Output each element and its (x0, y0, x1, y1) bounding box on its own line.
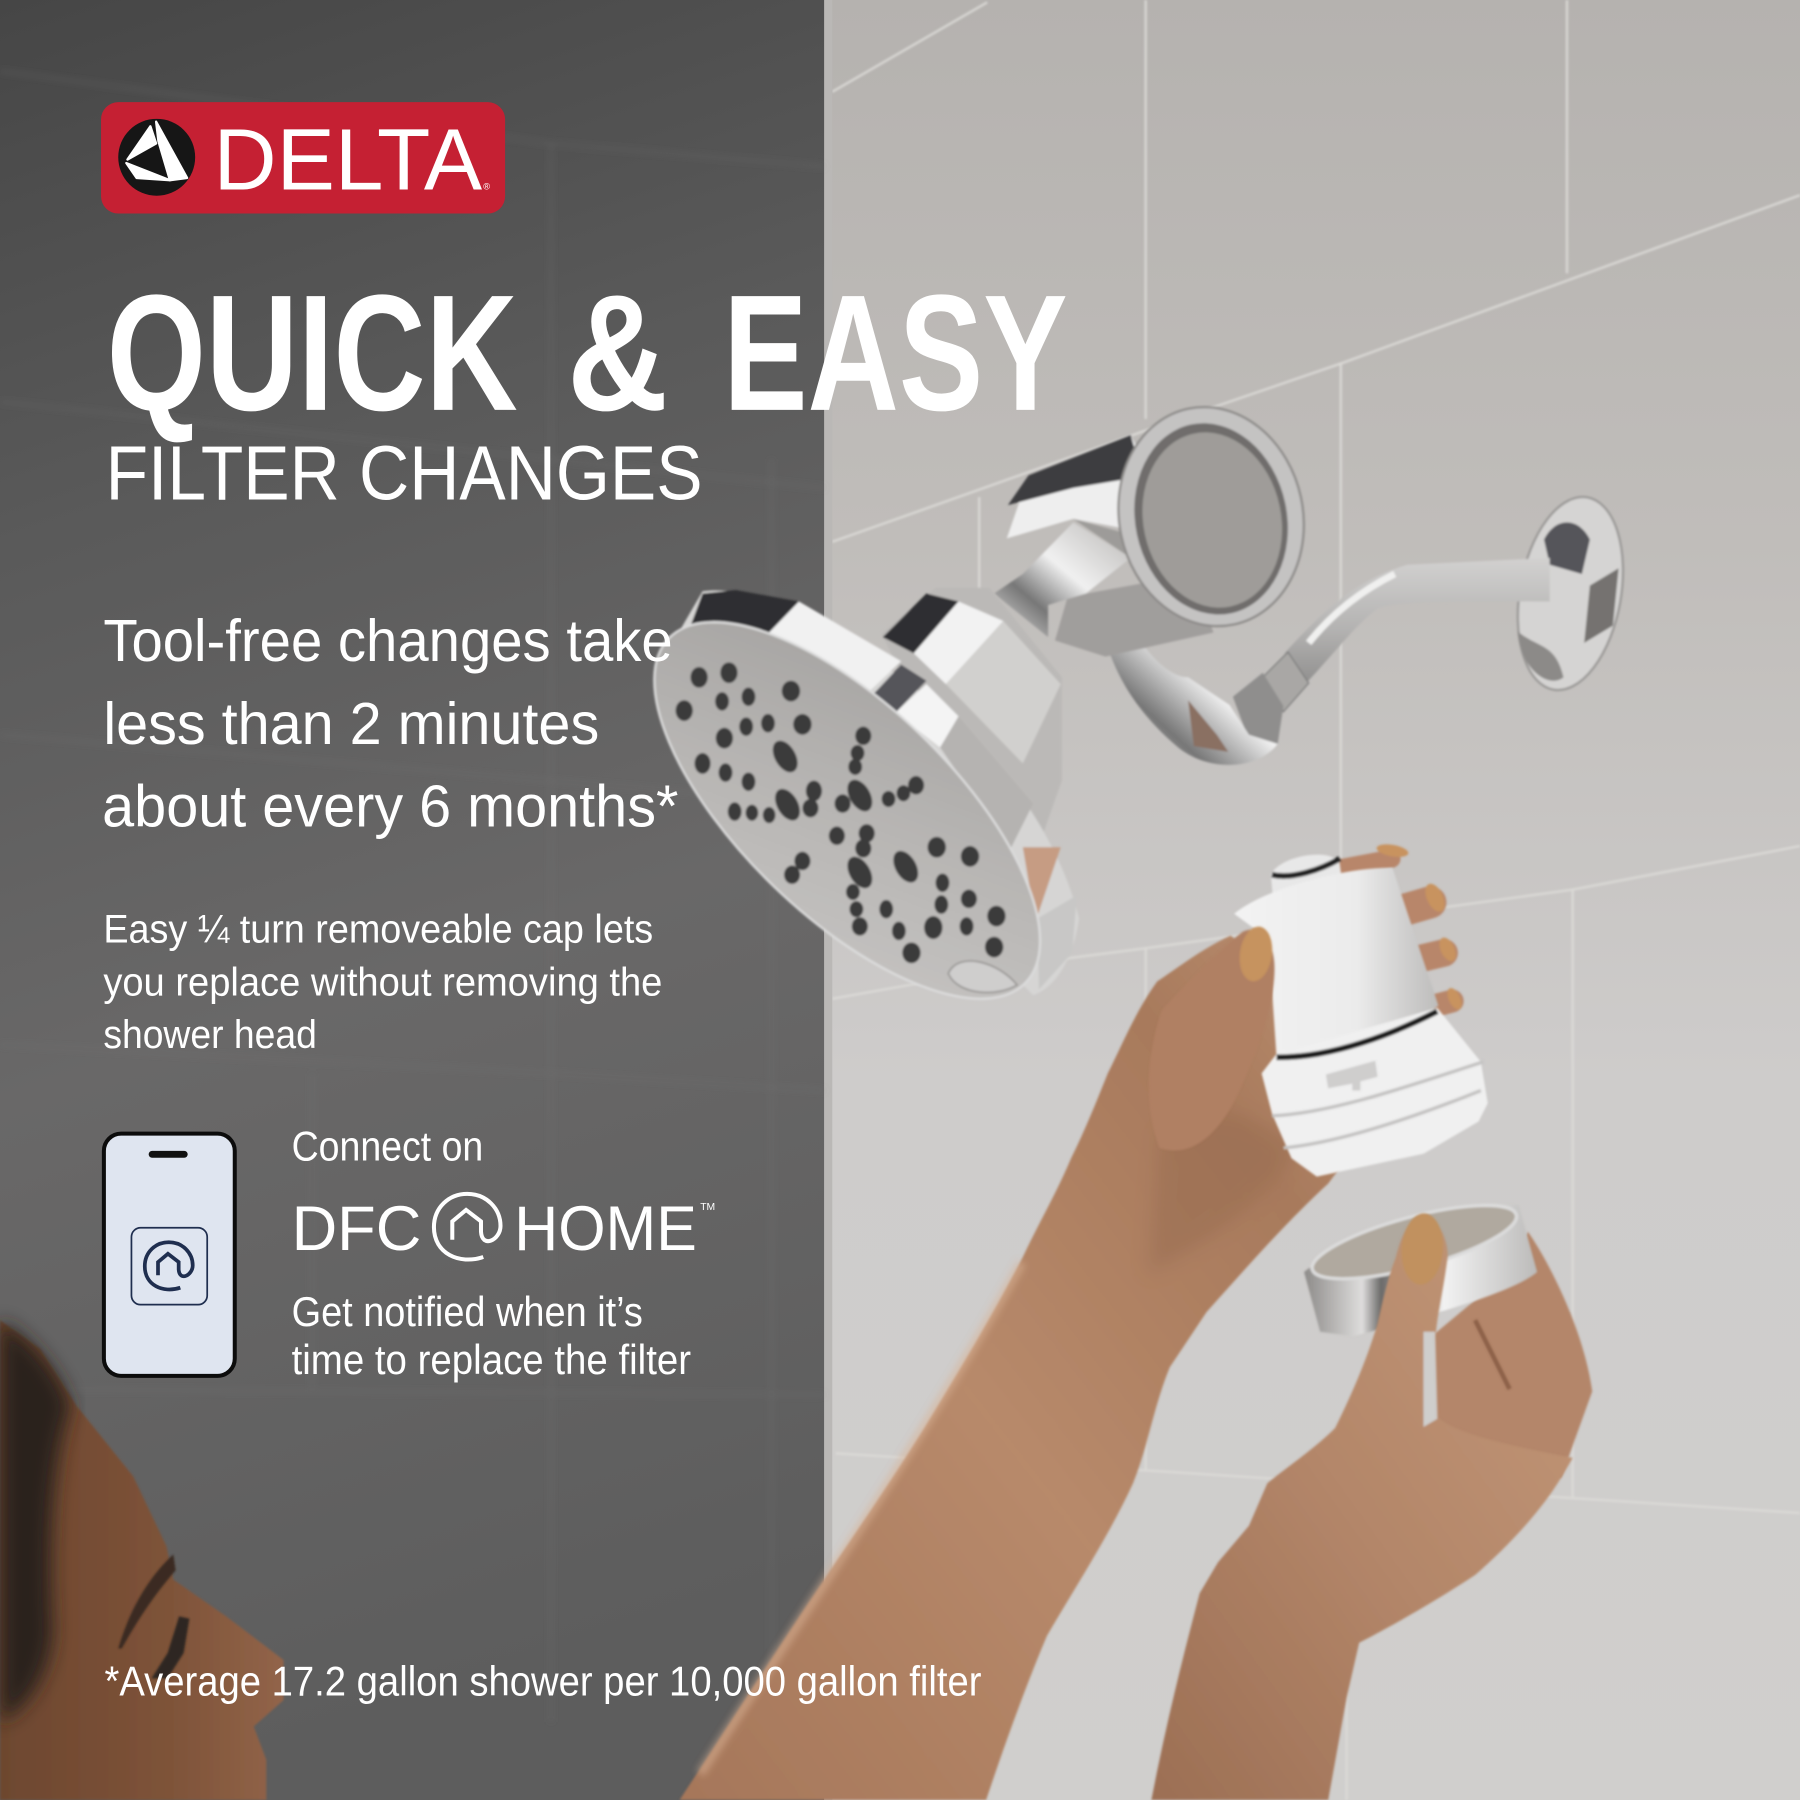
housing opening (1098, 390, 1324, 643)
cone (1073, 519, 1182, 620)
photo: filter housing (994, 390, 1324, 657)
photo: chrome cap (1304, 1190, 1537, 1336)
main benefit text: less than 2 minutes (103, 690, 599, 757)
thumbnail (1399, 1212, 1445, 1286)
app icon tile (131, 1228, 207, 1305)
secondary benefit text: you replace without removing the (103, 959, 662, 1004)
app home logo (145, 1242, 193, 1290)
cap interior (1306, 1190, 1523, 1294)
main benefit text: Tool-free changes take (103, 607, 673, 674)
photo: woman's face (0, 1320, 284, 1800)
swivel neck (994, 522, 1131, 637)
thumbnail (1236, 924, 1276, 983)
spray face (595, 562, 1099, 1059)
footnote: *Average 17.2 gallon shower per 10,000 gallon filter (104, 1659, 982, 1705)
arm rim light (700, 1263, 1022, 1774)
secondary benefit text (103, 906, 662, 1057)
eyebrow (118, 1554, 176, 1648)
filter lower base (1262, 1008, 1488, 1177)
title: & (567, 261, 668, 446)
hook elbow (1099, 602, 1278, 765)
gap between thumb and fingers (1423, 1332, 1437, 1427)
face skin (0, 1320, 284, 1800)
main benefit text: about every 6 months* (102, 773, 678, 840)
secondary benefit text: shower head (103, 1012, 317, 1057)
title: QUICK (107, 261, 518, 446)
base latch (1326, 1061, 1378, 1091)
title (107, 261, 1068, 446)
post seal ring (1272, 859, 1340, 876)
app notification text: Get notified when it’s (292, 1289, 643, 1335)
lower housing shadow (1055, 574, 1213, 657)
wall flange (1504, 489, 1637, 698)
icon: phone with app (104, 1134, 235, 1376)
logo: DFC Home: TM (700, 1202, 715, 1213)
photo: shower arm and flange (1099, 489, 1637, 765)
filter upper body (1234, 868, 1438, 1058)
arm pipe (1285, 558, 1550, 686)
chrome rim (677, 590, 1079, 995)
spray nozzles (676, 662, 1006, 963)
rear body (882, 588, 1062, 878)
housing cylinder light (1007, 435, 1182, 540)
housing dark band (1008, 435, 1142, 505)
eyelashes (152, 1616, 189, 1678)
logo: DFC Home (292, 1194, 715, 1264)
photo: second hand thumb and palm (1151, 1212, 1573, 1800)
hex nut (1233, 673, 1283, 744)
photo: white replacement filter (1234, 855, 1488, 1177)
arm and palm (680, 936, 1355, 1800)
panel edge band (824, 0, 832, 1800)
app notification text: time to replace the filter (292, 1337, 691, 1383)
hair (0, 1320, 71, 1722)
fingernails (1376, 842, 1465, 1012)
home icon mark (434, 1194, 501, 1260)
fingers behind filter (1343, 859, 1452, 1010)
app notification text (292, 1289, 691, 1383)
finger crease (1475, 1320, 1510, 1389)
logo: DFC Home: HOME (514, 1194, 697, 1264)
spray selector tab (948, 961, 1017, 992)
base ridges (1272, 1062, 1483, 1148)
logo: DFC Home: DFC (292, 1194, 421, 1264)
logo badge (101, 102, 505, 214)
tile grout lines (832, 0, 1800, 1800)
photo: thumb on filter (1149, 924, 1276, 1150)
palm shadow (1148, 1112, 1297, 1274)
title: EASY (723, 261, 1068, 446)
photo: shower head (595, 562, 1099, 1059)
logo mark (118, 119, 195, 196)
photo: raised arm and hand holding filter (680, 842, 1465, 1800)
threaded collar (1263, 652, 1309, 712)
registered mark: ® (483, 181, 490, 191)
logo: Delta (101, 102, 505, 214)
filter post (1271, 855, 1343, 913)
connect label: Connect on (292, 1124, 483, 1170)
translucent dark text panel (0, 0, 832, 1800)
black seal ring (1277, 1011, 1437, 1057)
cap band (1304, 1205, 1537, 1336)
subtitle: FILTER CHANGES (106, 430, 703, 516)
secondary benefit text: Easy ¼ turn removeable cap lets (103, 906, 653, 951)
panel tile texture (0, 71, 824, 1722)
photo: fingers behind cap (1418, 1232, 1592, 1481)
logo wordmark: DELTA (214, 111, 483, 208)
main benefit text (102, 607, 678, 840)
